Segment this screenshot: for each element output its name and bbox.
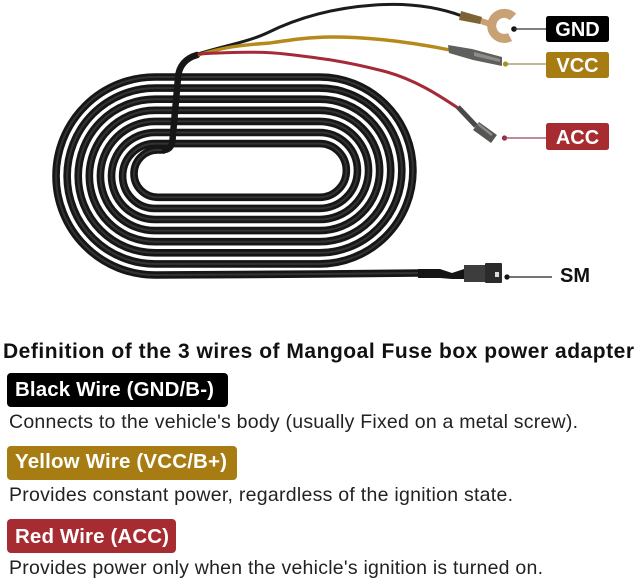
black wire	[198, 4, 462, 54]
callout: VCC	[503, 52, 609, 78]
callout: SM: SM	[560, 265, 590, 287]
yellow wire	[198, 37, 450, 55]
badge: red wire	[7, 519, 176, 553]
callout: ACC: ACC	[556, 127, 599, 149]
coiled black cable	[56, 77, 420, 275]
badge: yellow wire	[7, 446, 237, 480]
description: red wire: Provides power only when the vehicle's ignition is turned on.	[9, 557, 543, 579]
callout: GND: GND	[555, 19, 600, 41]
badge: red wire: Red Wire (ACC)	[15, 525, 169, 548]
red wire	[198, 52, 458, 108]
icon: SM connector	[418, 263, 502, 283]
icon: fork terminal	[459, 11, 513, 38]
badge: black wire: Black Wire (GND/B-)	[15, 378, 214, 401]
callout: VCC: VCC	[556, 55, 599, 77]
cable trunk rising through the coil	[165, 55, 197, 150]
description: black wire: Connects to the vehicle's body (usually Fixed on a metal screw).	[9, 411, 578, 433]
callout: ACC	[502, 123, 609, 150]
icon: ACC bullet connector	[458, 107, 494, 139]
badge: black wire	[7, 373, 228, 407]
callout: SM	[504, 265, 590, 287]
icon: VCC bullet connector	[448, 45, 502, 66]
callout: GND	[511, 16, 609, 42]
description: yellow wire: Provides constant power, regardless of the ignition state.	[9, 484, 513, 506]
title: Definition of the 3 wires of Mangoal Fuse box power adapter	[3, 340, 634, 363]
badge: yellow wire: Yellow Wire (VCC/B+)	[15, 450, 227, 473]
